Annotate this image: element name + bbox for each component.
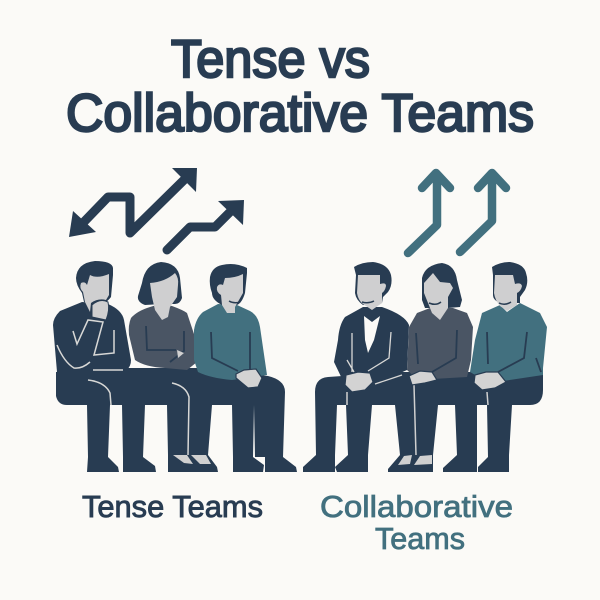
title: Tense vs (171, 30, 370, 89)
icon: rising arrow one (408, 173, 450, 253)
bench and legs (56, 368, 297, 472)
figure: thinking man (53, 261, 131, 405)
title: Collaborative Teams (66, 84, 534, 143)
icon: erratic arrow one (69, 168, 197, 237)
icon: erratic arrow two (167, 200, 244, 250)
figure: woman with crossed arms (129, 262, 211, 464)
label: collaborative teams: Teams (375, 521, 465, 556)
panel: collaborative teams (303, 173, 547, 472)
figure: man in blazer (334, 262, 409, 392)
label: tense teams: Tense Teams (82, 489, 263, 524)
icon: rising arrow two (460, 173, 506, 252)
label: collaborative teams (320, 489, 513, 556)
figure: woman in grey sweater (407, 263, 473, 385)
figure: man in teal sweater (194, 264, 267, 388)
label: collaborative teams: Collaborative (320, 489, 513, 524)
panel: tense teams (53, 168, 297, 472)
figure: man in teal sweater right (470, 262, 547, 390)
shared legs and bench (303, 372, 543, 472)
title (66, 30, 534, 143)
